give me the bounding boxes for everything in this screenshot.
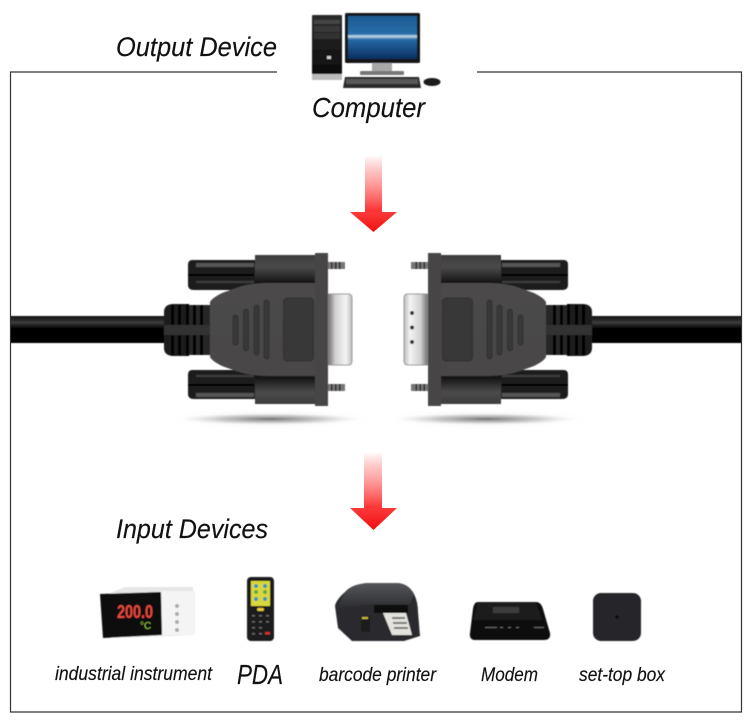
label: industrial instrument: industrial instrument — [55, 664, 213, 685]
icon: industrial instrument: °C — [140, 621, 151, 632]
heading: input devices: Input Devices — [116, 514, 268, 544]
heading: output device: Output Device — [116, 32, 277, 62]
arrow: down to input devices — [350, 452, 397, 530]
tower — [312, 15, 342, 80]
arrow: down from computer — [350, 155, 397, 232]
label: barcode printer: barcode printer — [319, 665, 437, 686]
label: modem: Modem — [481, 665, 538, 686]
icon: set-top box — [593, 593, 641, 641]
icon: barcode printer — [335, 583, 420, 641]
floor shadows — [165, 408, 591, 430]
label: set-top box: set-top box — [579, 665, 666, 686]
icon: industrial instrument — [100, 587, 195, 638]
icon: industrial instrument: 200.0 — [117, 602, 153, 622]
connector: left female — [0, 253, 352, 406]
labels: input devices — [55, 659, 666, 690]
connector: right male — [404, 253, 750, 406]
heading: computer: Computer — [312, 92, 427, 123]
keyboard — [343, 77, 421, 88]
icon: PDA — [247, 577, 274, 641]
mouse — [424, 78, 440, 86]
icon: desktop computer — [312, 13, 440, 88]
monitor — [345, 13, 420, 75]
icon: modem — [470, 602, 550, 640]
label: PDA: PDA — [237, 659, 283, 690]
